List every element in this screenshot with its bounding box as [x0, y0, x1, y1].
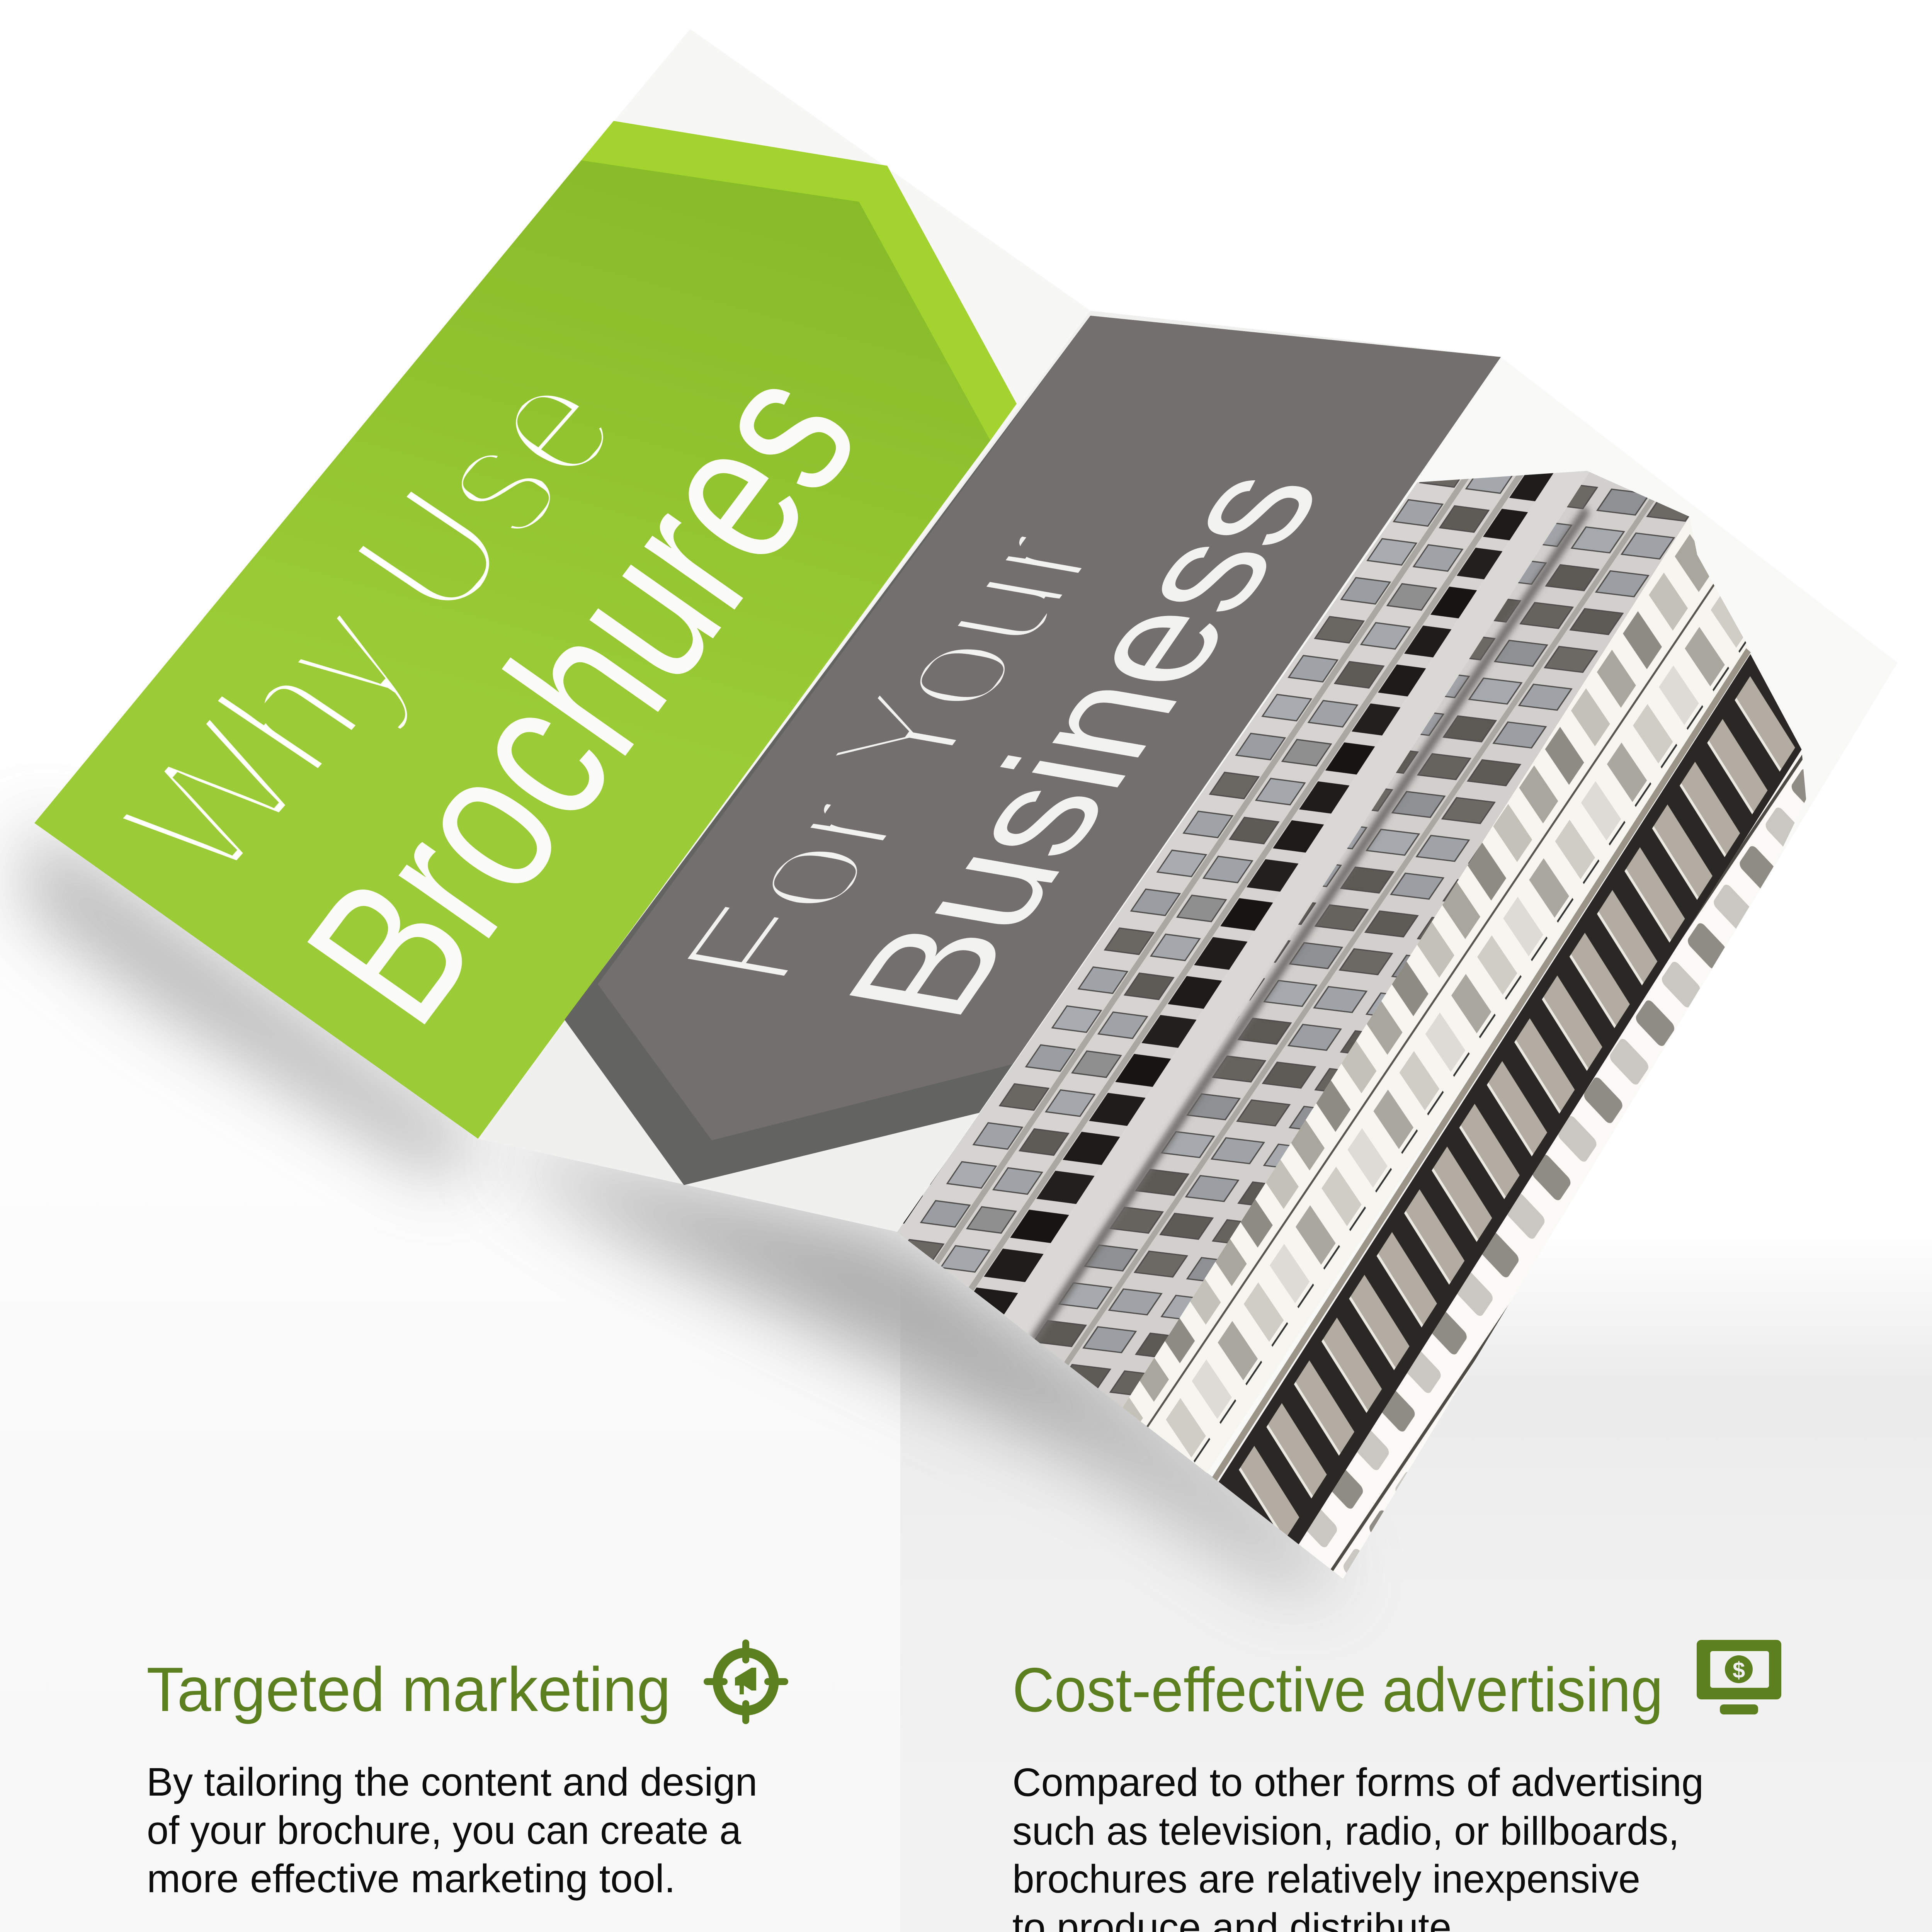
icon: monitor with dollar: $	[1733, 1658, 1745, 1683]
left panel paper	[34, 29, 1090, 1139]
tri-fold brochure	[34, 29, 1898, 1579]
white facade windows	[1122, 517, 1750, 1473]
tower two windows	[1031, 471, 1689, 1408]
green cover shape	[34, 121, 1017, 1139]
section: cost-effective advertising	[1012, 1640, 1781, 1932]
center panel paper	[478, 311, 1501, 1232]
heading: Targeted marketing	[146, 1655, 671, 1725]
headline: Brochures: Brochures	[262, 328, 900, 1061]
body text: brochures are relatively inexpensive	[1012, 1857, 1640, 1901]
building photo	[897, 471, 1806, 1579]
curved balcony strip	[1299, 750, 1806, 1579]
body text	[146, 1760, 757, 1901]
tower one windows	[897, 471, 1555, 1315]
headline: For Your: For Your	[642, 521, 1134, 995]
icon: monitor with dollar	[1697, 1640, 1781, 1714]
section: targeted marketing	[146, 1639, 788, 1901]
body text: Compared to other forms of advertising	[1012, 1760, 1704, 1804]
headline: Why Use: Why Use	[83, 335, 658, 911]
grey panel shape	[565, 316, 1501, 1185]
heading: Cost-effective advertising	[1012, 1655, 1663, 1725]
body text: more effective marketing tool.	[147, 1856, 675, 1901]
body text: By tailoring the content and design	[146, 1760, 757, 1804]
body text: such as television, radio, or billboards,	[1012, 1809, 1679, 1853]
balcony stripe	[1219, 654, 1802, 1544]
gap between towers	[1004, 471, 1590, 1340]
body text	[1012, 1760, 1704, 1932]
body text: of your brochure, you can create a	[147, 1808, 742, 1852]
headline: Business: Business	[807, 460, 1360, 1032]
right panel paper	[897, 357, 1898, 1578]
icon: target with megaphone	[704, 1639, 788, 1724]
brochure drop shadow	[23, 823, 1343, 1584]
